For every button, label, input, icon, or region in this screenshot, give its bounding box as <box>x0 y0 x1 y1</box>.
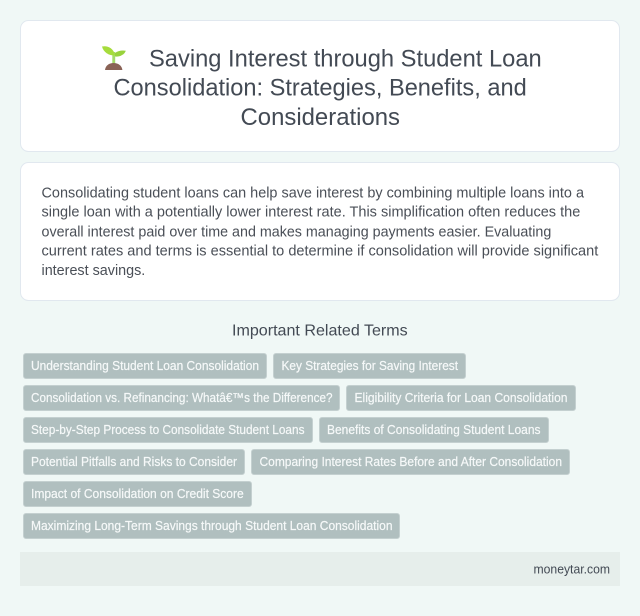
tag: Consolidation vs. Refinancing: Whatâ€™s the Difference? <box>31 391 332 405</box>
panel: title card <box>20 20 620 152</box>
tag <box>320 418 548 442</box>
title text: Saving Interest through Student Loan <box>149 46 542 73</box>
title text: Considerations <box>240 104 400 131</box>
summary paragraph: interest savings. <box>42 263 145 279</box>
footer source: moneytar.com <box>534 561 610 576</box>
tag <box>24 418 312 442</box>
summary paragraph <box>42 185 598 279</box>
panel: related term tags <box>24 354 576 538</box>
tag: Potential Pitfalls and Risks to Consider <box>31 455 237 469</box>
tag <box>24 386 340 410</box>
tag: Eligibility Criteria for Loan Consolidation <box>354 391 568 405</box>
title text <box>114 46 542 131</box>
icon: seedling <box>102 46 126 70</box>
summary paragraph: overall interest paid over time and makes managing payments easier. Evaluating <box>42 225 551 241</box>
tag: Key Strategies for Saving Interest <box>282 359 458 373</box>
tag <box>274 354 466 378</box>
tag: Benefits of Consolidating Student Loans <box>327 423 540 437</box>
tag <box>252 450 570 474</box>
tag: Maximizing Long-Term Savings through Student Loan Consolidation <box>31 519 392 533</box>
tag <box>24 514 400 538</box>
title text: Consolidation: Strategies, Benefits, and <box>114 75 527 102</box>
summary paragraph: Consolidating student loans can help save interest by combining multiple loans into a <box>42 185 584 201</box>
tag <box>24 482 252 506</box>
tag <box>24 354 266 378</box>
summary paragraph: current rates and terms is essential to determine if consolidation will provide significant <box>42 244 598 260</box>
tag <box>346 386 576 410</box>
panel: summary card <box>20 162 620 300</box>
tag <box>24 450 244 474</box>
heading: related terms: Important Related Terms <box>232 323 408 340</box>
tag: Step-by-Step Process to Consolidate Student Loans <box>31 423 304 437</box>
summary paragraph: single loan with a potentially lower interest rate. This simplification often reduces the <box>42 205 580 221</box>
tag: Understanding Student Loan Consolidation <box>31 359 259 373</box>
tag: Comparing Interest Rates Before and After Consolidation <box>260 455 562 469</box>
tag: Impact of Consolidation on Credit Score <box>31 487 244 501</box>
footer bar <box>20 552 620 586</box>
